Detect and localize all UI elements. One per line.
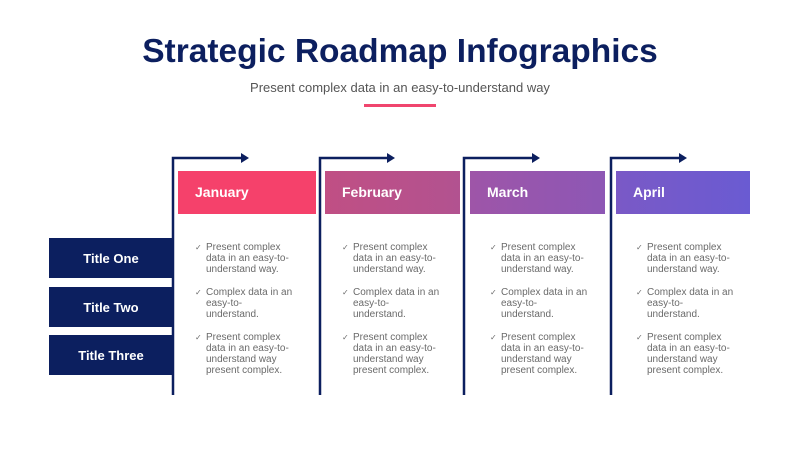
column text: January: Present complex data in an easy-to-understand way.: [206, 242, 289, 275]
header: April: April: [633, 184, 665, 200]
column text: March: [491, 242, 587, 376]
column text: January: Complex data in an easy-to-understand.: [206, 287, 292, 320]
text: Title One: [83, 250, 139, 266]
header: January: [178, 171, 316, 214]
column text: March: Present complex data in an easy-to-understand way.: [501, 242, 584, 275]
column text: March: Present complex data in an easy-to-understand way present complex.: [501, 332, 584, 376]
column text: April: [637, 242, 733, 376]
header: February: [325, 171, 460, 214]
column text: April: Complex data in an easy-to-understand.: [647, 287, 733, 320]
row titles: [49, 238, 172, 375]
header: February: February: [342, 184, 402, 200]
column text: February: Present complex data in an easy-to-understand way.: [353, 242, 436, 275]
column text: April: Present complex data in an easy-to-understand way present complex.: [647, 332, 730, 376]
header: March: [470, 171, 605, 214]
column text: April: Present complex data in an easy-to-understand way.: [647, 242, 730, 275]
column text: February: Present complex data in an easy-to-understand way present complex.: [353, 332, 436, 376]
column text: February: [343, 242, 439, 376]
column text: March: Complex data in an easy-to-understand.: [501, 287, 587, 320]
column text: February: Complex data in an easy-to-understand.: [353, 287, 439, 320]
header: March: March: [487, 184, 528, 200]
column text: January: [196, 242, 292, 376]
header: April: [616, 171, 750, 214]
text: Title Three: [78, 348, 144, 362]
accent underline: [364, 104, 436, 107]
header: January: January: [195, 184, 249, 200]
title: Strategic Roadmap Infographics: [142, 33, 658, 70]
column text: January: Present complex data in an easy-to-understand way present complex.: [206, 332, 289, 376]
subtitle: Present complex data in an easy-to-understand way: [250, 80, 550, 95]
text: Title Two: [83, 300, 139, 314]
